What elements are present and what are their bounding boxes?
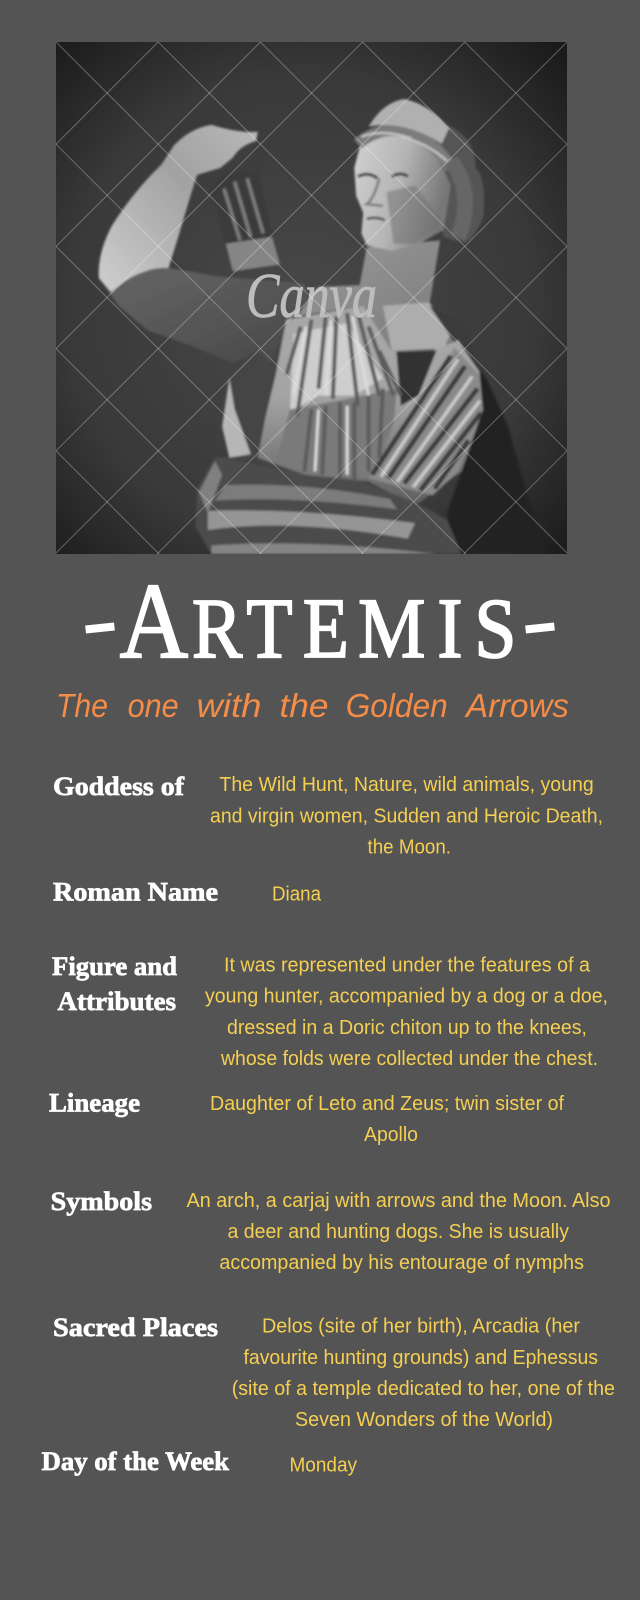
label: Symbols: Symbols [51,1187,152,1216]
title left dash [85,623,115,633]
value: Goddess of [210,774,603,859]
title letters: R [192,581,242,676]
chest gap shadow [396,351,436,406]
panel: statue photo [56,42,567,554]
watermark: Canva: Canva [246,260,377,331]
subtitle: one [128,687,179,724]
value: Lineage [210,1093,564,1146]
row: Goddess of [53,772,603,859]
watermark lattice lines [56,42,567,554]
right arm in shadow [447,371,529,552]
photo dark backdrop [56,42,567,554]
raised forearm and hand [99,125,258,292]
title right dash [525,623,555,633]
diagonal sash [369,347,483,496]
quiver of arrows [242,224,270,237]
facial features [358,174,408,178]
subtitle: Golden [346,687,448,724]
label: Sacred Places: Sacred Places [53,1313,218,1342]
subtitle: the [280,687,328,724]
value: Figure and Attributes: dressed in a Doric chiton up to the knees, [227,1017,587,1039]
row: Sacred Places [53,1313,615,1431]
sash folds [372,356,481,490]
value: Symbols: An arch, a carjaj with arrows and the Moon. Also [186,1190,610,1212]
chiton dress [258,306,483,506]
label: Figure and Attributes: Attributes [58,987,176,1016]
torso side in shadow [229,316,297,475]
value: Sacred Places: Seven Wonders of the World) [295,1409,553,1431]
title letters: E [303,581,349,676]
label: Roman Name: Roman Name [53,878,218,907]
hair waves [358,130,451,168]
label: Figure and Attributes: Figure and [52,952,178,981]
value: Diana: Diana [272,884,322,906]
value: Sacred Places [232,1316,615,1431]
neck and chest [297,240,458,351]
value: Lineage: Daughter of Leto and Zeus; twin sister of [210,1093,564,1115]
statue of Artemis [99,99,547,554]
row: Symbols [51,1187,610,1274]
value: Figure and Attributes: young hunter, accompanied by a dog or a doe, [205,986,608,1008]
row: Roman Name [53,878,322,907]
title letters: T [246,581,293,676]
shoulder drape shadow [429,306,467,352]
value: Monday: Monday [290,1455,357,1477]
waist drape [195,458,461,554]
value: Lineage: Apollo [364,1124,418,1146]
upper arm [99,268,311,364]
value: Goddess of: The Wild Hunt, Nature, wild animals, young [219,774,594,796]
title letters: M [358,581,425,676]
hair back [434,126,484,243]
subtitle: The [56,687,108,724]
value: Sacred Places: favourite hunting grounds) and Ephessus [244,1347,598,1369]
subtitle: with [196,687,262,724]
value: Symbols: a deer and hunting dogs. She is usually [228,1221,569,1243]
title letters: I [437,581,463,676]
quiver strap [226,237,280,271]
subtitle: Arrows [464,687,569,724]
title letters: S [474,581,516,676]
value: Goddess of: the Moon. [368,837,451,859]
hair curls [451,161,465,237]
value: Symbols [186,1190,610,1274]
value: Sacred Places: (site of a temple dedicated to her, one of the [232,1378,615,1400]
row: Day of the Week [42,1447,357,1477]
chiton folds [286,313,401,482]
title: Artemis [85,561,555,681]
drape bands [208,510,415,539]
row: Figure and Attributes [52,952,608,1070]
label: Goddess of: Goddess of [53,772,184,801]
face [354,130,451,251]
value: Figure and Attributes [205,955,608,1070]
value: Symbols: accompanied by his entourage of nymphs [219,1252,584,1274]
label: Figure and Attributes [52,952,178,1016]
value: Goddess of: and virgin women, Sudden and Heroic Death, [210,805,603,827]
body side highlight [222,378,251,458]
subtitle [56,687,569,724]
row: Lineage [49,1089,564,1146]
title letters [120,561,516,681]
label: Day of the Week: Day of the Week [42,1447,230,1476]
chiton highlights [290,323,383,413]
title letters: A [120,561,188,681]
label: Lineage: Lineage [49,1089,140,1118]
value: Figure and Attributes: It was represented under the features of a [224,955,591,977]
value: Sacred Places: Delos (site of her birth), Arcadia (her [262,1316,580,1338]
headband cap [369,99,449,144]
value: Figure and Attributes: whose folds were collected under the chest. [220,1048,598,1070]
